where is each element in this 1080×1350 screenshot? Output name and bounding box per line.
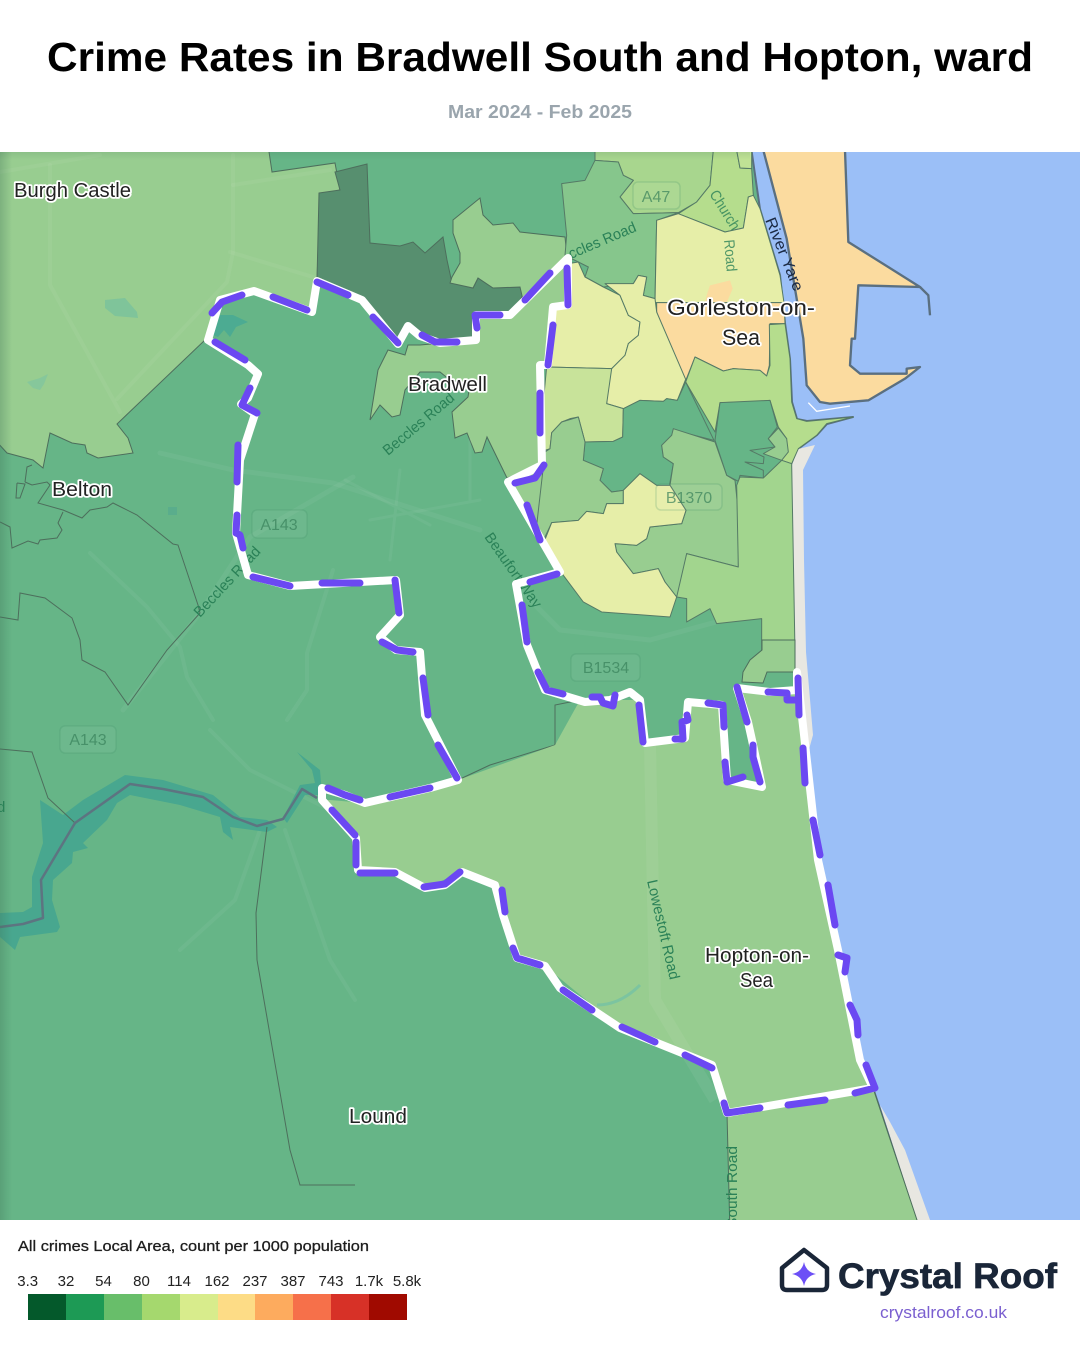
- legend colour swatches: [28, 1294, 407, 1320]
- region: north-west block: [562, 160, 678, 299]
- river channel: [0, 784, 317, 927]
- shield: B1534: B1534: [583, 660, 629, 677]
- legend scale labels: [17, 1273, 422, 1290]
- Gorleston neighbourhoods (traced at 3x): [537, 150, 930, 652]
- label: Lound: Lound: [349, 1106, 407, 1128]
- sea and river Yare: [750, 140, 1080, 1235]
- region: Bradwell dark area: [317, 164, 523, 343]
- legend scale labels: 162: [204, 1273, 230, 1290]
- Belton boundary: [0, 465, 200, 705]
- legend scale labels: 387: [280, 1273, 306, 1290]
- region: Gorleston harbour peninsula: [763, 150, 920, 404]
- logo: Crystal Roof: [782, 1250, 1057, 1322]
- region: central pale: [605, 275, 686, 409]
- Lowestoft Road faint line: [684, 1058, 718, 1102]
- region: north Bradwell light patch: [450, 198, 567, 300]
- region: Gorleston pale north: [655, 195, 784, 303]
- road labels: [0, 187, 806, 1228]
- region: central Bradwell light area: [370, 258, 568, 478]
- map edge shading: [0, 152, 750, 1220]
- shield: A143 south: [60, 726, 116, 753]
- region: coast south of Gorleston: [742, 640, 795, 683]
- region: orange patch: [705, 280, 733, 303]
- region: coastal green: [677, 460, 795, 652]
- road label: Church: Church: [706, 187, 743, 233]
- legend title: All crimes Local Area, count per 1000 population: [18, 1238, 369, 1255]
- website url: crystalroof.co.uk: [880, 1304, 1008, 1322]
- logo wordmark: Crystal Roof: [838, 1257, 1057, 1296]
- shield: A47: A47: [642, 189, 670, 206]
- estuary water: [0, 752, 322, 950]
- road label: South Road: South Road: [724, 1146, 741, 1228]
- legend: [17, 1238, 422, 1320]
- label: Burgh Castle: Burgh Castle: [14, 180, 131, 202]
- legend scale labels: 743: [318, 1273, 344, 1290]
- region: west pale: [547, 262, 640, 369]
- road label: Lowestoft Road: Lowestoft Road: [643, 878, 683, 981]
- legend scale labels: 3.3: [17, 1273, 38, 1290]
- region: pale south: [543, 474, 686, 617]
- local area boundary lines: [0, 465, 580, 1185]
- title: Crime Rates in Bradwell South and Hopton, ward: [47, 34, 1033, 80]
- legend scale labels: 237: [242, 1273, 268, 1290]
- place labels: [14, 180, 815, 1128]
- subtitle: date range: Mar 2024 - Feb 2025: [448, 101, 632, 122]
- label: Hopton-on-Sea: Hopton-on-: [705, 945, 809, 967]
- shield: A47: [633, 182, 680, 209]
- region: Hopton ward south: [322, 688, 873, 1113]
- road label: Beccles Road west: Beccles Road: [190, 543, 264, 621]
- road label: Beaufort Way: Beaufort Way: [481, 530, 545, 612]
- road label: Beccles Road Bradwell: Beccles Road: [380, 389, 458, 459]
- region: centre mid green: [615, 429, 739, 597]
- region: harbour-side green: [686, 324, 853, 464]
- legend scale labels: 1.7k: [355, 1273, 384, 1290]
- region: A47 north: [595, 150, 713, 214]
- shield: B1370: [656, 484, 722, 510]
- region: Church Road north: [678, 150, 753, 232]
- region: top corner: [737, 150, 752, 169]
- legend scale labels: 114: [167, 1273, 191, 1290]
- beach strips: [792, 445, 815, 748]
- legend scale labels: 80: [133, 1273, 150, 1290]
- region: south coast: [726, 1092, 918, 1220]
- shield: B1370: B1370: [666, 490, 712, 507]
- label: Belton: Belton: [52, 479, 112, 501]
- shield: B1534: [571, 654, 640, 681]
- region: left mid green: [537, 417, 623, 542]
- legend scale labels: 5.8k: [393, 1273, 422, 1290]
- water label: River Yare: River Yare: [761, 215, 806, 294]
- region: Gorleston orange: [657, 303, 785, 381]
- shield: A143 south: A143: [69, 732, 107, 749]
- ward boundary: Bradwell South and Hopton: [208, 258, 875, 1113]
- road shields: [60, 182, 722, 753]
- road label: Beccles Road north: ccles Road: [566, 219, 639, 263]
- pond near Hopton: [597, 985, 640, 1005]
- faint road network: [48, 163, 472, 646]
- shield: A143 north: [252, 510, 307, 538]
- region: mid-light block: [542, 367, 623, 450]
- label: Hopton-on-Sea: [705, 945, 809, 992]
- region: light strip east of the ward boundary: [515, 474, 546, 538]
- region: east dark blob: [715, 400, 777, 481]
- region: small green beside blob: [763, 428, 788, 460]
- region: north-west light area: [0, 145, 340, 468]
- legend scale labels: 54: [95, 1273, 112, 1290]
- icon: house with star: [782, 1250, 827, 1290]
- label: Gorleston-on-Sea: Sea: [722, 325, 761, 350]
- label: Gorleston-on-Sea: [667, 295, 815, 350]
- label: Bradwell: Bradwell: [408, 374, 487, 396]
- label: Hopton-on-Sea: Sea: [740, 970, 774, 992]
- legend scale labels: 32: [58, 1273, 74, 1290]
- region: central dark: [583, 382, 714, 492]
- road label: Road (Church Road): Road: [720, 239, 740, 272]
- ponds: [27, 298, 248, 515]
- label: Gorleston-on-Sea: Gorleston-on-: [667, 295, 815, 320]
- shield: A143 north: A143: [260, 517, 298, 534]
